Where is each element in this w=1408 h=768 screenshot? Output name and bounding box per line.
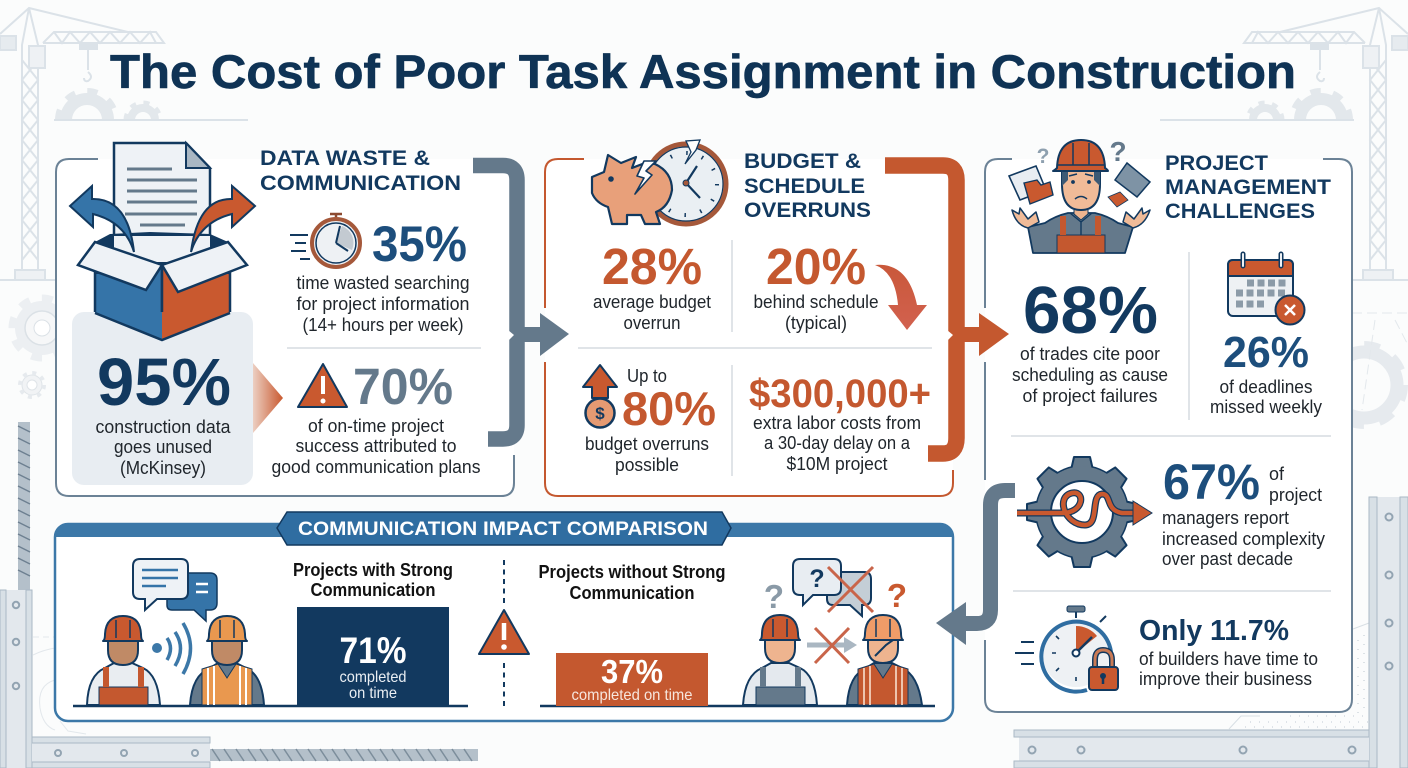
- stat: 20%: behind schedule: [754, 292, 878, 312]
- bar: with strong communication 71%: [293, 560, 453, 706]
- stat: up to 80%: [585, 366, 716, 475]
- icon: broken clock: [646, 140, 726, 224]
- icon: workers miscommunicating: ?: [809, 565, 825, 593]
- stat: up to 80%: 80%: [622, 382, 716, 435]
- icon: up arrow with coin: [583, 365, 617, 428]
- stat: only 11.7%: of builders have time to: [1139, 649, 1318, 669]
- stat: 26%: [1210, 328, 1322, 417]
- stat: 67%: 67%: [1163, 454, 1260, 510]
- stat: 26%: 26%: [1223, 328, 1309, 377]
- icon: timer with padlock: [1015, 606, 1118, 692]
- panel: data waste and communication: [55, 143, 514, 496]
- stat: 35%: [296, 216, 470, 335]
- stat: up to 80%: budget overruns: [585, 434, 709, 454]
- heading: budget: [744, 149, 871, 222]
- icon: up arrow with coin: $: [595, 404, 605, 423]
- icon: broken piggy bank: [592, 155, 672, 224]
- stat: 70%: of on-time project: [308, 416, 444, 436]
- heading: project management: [1165, 151, 1331, 223]
- arrow: elbow from project management to comparison: [936, 490, 1015, 645]
- callout: 95% statistic: 95%: [97, 345, 231, 420]
- stat: 67%: managers report: [1162, 508, 1289, 528]
- stat: 67%: [1162, 454, 1325, 569]
- arrow: bracket from data waste to budget: [473, 166, 569, 439]
- stat: only 11.7%: [1139, 615, 1318, 689]
- panel: communication impact comparison: [55, 512, 953, 721]
- bar: without strong communication 37%: Projects without Strong: [538, 562, 726, 582]
- background: right crane: [1160, 8, 1408, 280]
- title: The Cost of Poor Task Assignment in Construction: [110, 45, 1296, 98]
- bar: with strong communication 71%: on time: [349, 685, 397, 702]
- panel: project management challenges: [985, 136, 1352, 712]
- icon: workers miscommunicating: ?: [764, 578, 784, 615]
- stat: 67%: of: [1269, 464, 1285, 484]
- heading: project management: MANAGEMENT: [1165, 175, 1331, 199]
- stat: 28%: 28%: [602, 238, 702, 295]
- stat: 70%: [272, 358, 480, 477]
- bar: without strong communication 37%: [538, 562, 726, 706]
- arrow: bracket from budget to project management: [885, 166, 1009, 454]
- bar: with strong communication 71%: completed: [340, 669, 406, 686]
- stat: 20%: 20%: [766, 238, 866, 295]
- stat: 70%: 70%: [353, 358, 453, 415]
- stat: 28%: [593, 238, 711, 333]
- background: rebar: [18, 422, 478, 761]
- icon: workers communicating: [87, 559, 264, 705]
- icon: curved down arrow: [875, 265, 927, 330]
- stat: $300,000+: $10M project: [786, 454, 888, 474]
- stat: 20%: (typical): [785, 313, 847, 333]
- icon: warning center: [479, 610, 529, 654]
- icon: document in box with arrows: [70, 143, 255, 340]
- arrow: callout pointer: [253, 363, 283, 433]
- stat: 20%: [754, 238, 878, 333]
- stat: 68%: of project failures: [1022, 386, 1158, 406]
- stat: 68%: 68%: [1023, 273, 1158, 348]
- bar: without strong communication 37%: completed on time: [572, 687, 693, 704]
- stat: 67%: project: [1269, 485, 1322, 505]
- bar: with strong communication 71%: Communication: [310, 580, 436, 600]
- background: steel column right: [1369, 497, 1408, 768]
- stat: 70%: good communication plans: [272, 457, 480, 477]
- icon: stopwatch: [290, 214, 360, 267]
- bar: without strong communication 37%: 37%: [601, 653, 663, 690]
- stat: 26%: missed weekly: [1210, 397, 1322, 417]
- icon: gear with tangled arrow: [1017, 457, 1152, 567]
- heading: budget: BUDGET &: [744, 149, 861, 173]
- background: steel column left: [0, 590, 32, 768]
- icon: warning triangle: [298, 364, 347, 407]
- stat: 67%: over past decade: [1162, 549, 1293, 569]
- callout: 95% statistic: goes unused: [114, 437, 212, 457]
- heading: data waste: DATA WASTE &: [260, 146, 430, 170]
- callout: 95% statistic: (McKinsey): [120, 458, 206, 478]
- bar: with strong communication 71%: Projects with Strong: [293, 560, 453, 580]
- icon: confused worker: ?: [1037, 145, 1049, 168]
- stat: 35%: 35%: [372, 216, 467, 272]
- stat: up to 80%: Up to: [627, 366, 667, 386]
- stat: only 11.7%: improve their business: [1139, 669, 1312, 689]
- callout: 95% statistic: construction data: [96, 417, 231, 437]
- stat: $300,000+: $300,000+: [749, 372, 931, 416]
- stat: 67%: increased complexity: [1162, 529, 1325, 549]
- stat: 35%: for project information: [296, 294, 470, 314]
- bar: without strong communication 37%: Communication: [570, 583, 694, 603]
- banner heading: [277, 512, 731, 545]
- background: left crane: [0, 8, 248, 280]
- icon: workers miscommunicating: ?: [887, 577, 907, 614]
- stat: 28%: average budget: [593, 292, 711, 312]
- heading: budget: SCHEDULE: [744, 174, 865, 198]
- stat: 68%: of trades cite poor: [1020, 344, 1160, 364]
- stat: 68%: [1012, 273, 1168, 406]
- background: steel beam lower right: [1014, 730, 1369, 768]
- banner heading: COMMUNICATION IMPACT COMPARISON: [298, 519, 708, 540]
- stat: $300,000+: a 30-day delay on a: [764, 433, 911, 453]
- stat: 35%: time wasted searching: [296, 273, 470, 293]
- icon: confused worker: [1009, 136, 1150, 253]
- callout: 95% statistic: [72, 312, 253, 485]
- heading: project management: CHALLENGES: [1165, 199, 1315, 223]
- panel: budget and schedule overruns: [545, 140, 953, 496]
- stat: $300,000+: [749, 372, 931, 474]
- background: gears and blueprint lines: [12, 298, 1408, 734]
- background: steel beam lower left: [32, 737, 210, 768]
- stat: only 11.7%: Only 11.7%: [1139, 615, 1289, 647]
- stat: up to 80%: possible: [615, 455, 679, 475]
- stat: 35%: (14+ hours per week): [302, 315, 464, 335]
- icon: confused worker: ?: [1109, 136, 1127, 167]
- icon: calendar with x: [1228, 254, 1304, 324]
- heading: data waste: [260, 146, 461, 195]
- stat: 70%: success attributed to: [296, 436, 456, 456]
- stat: 28%: overrun: [624, 313, 680, 333]
- stat: 26%: of deadlines: [1220, 377, 1312, 397]
- icon: workers miscommunicating: [743, 559, 922, 705]
- bar: with strong communication 71%: 71%: [340, 630, 406, 671]
- stat: 68%: scheduling as cause: [1012, 365, 1168, 385]
- heading: data waste: COMMUNICATION: [260, 171, 461, 195]
- heading: budget: OVERRUNS: [744, 198, 871, 222]
- stat: $300,000+: extra labor costs from: [753, 413, 921, 433]
- heading: project management: PROJECT: [1165, 151, 1268, 175]
